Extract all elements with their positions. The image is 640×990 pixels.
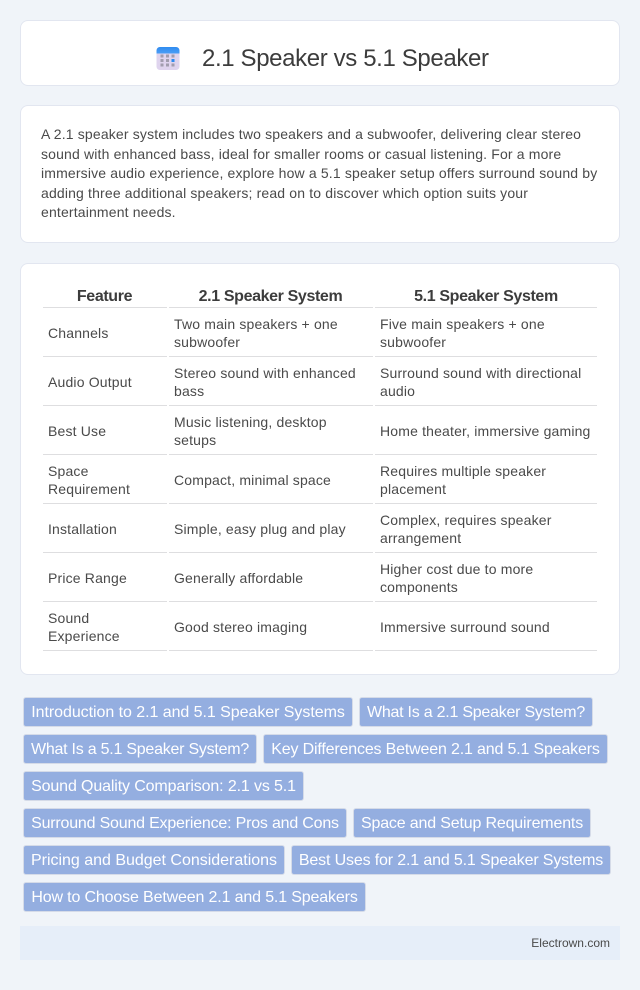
table header: 5.1 Speaker System [414,288,558,305]
intro paragraph: adding three additional speakers; read on to discover which option suits your [41,184,528,200]
table header [77,288,558,305]
topic tags: Sound Quality Comparison: 2.1 vs 5.1 [31,778,296,795]
topic tags: Introduction to 2.1 and 5.1 Speaker Systems [31,704,345,721]
row: audio output: Audio Output [48,374,132,390]
intro paragraph: sound with enhanced bass, ideal for smaller rooms or casual listening. For a more [41,146,561,162]
row: space requirement: Requirement [48,481,130,497]
table header: 2.1 Speaker System [199,288,342,305]
row: audio output: Surround sound with directional [380,365,581,381]
row: installation [48,512,552,546]
intro paragraph: A 2.1 speaker system includes two speakers and a subwoofer, delivering clear stereo [41,126,581,142]
panel: title header [20,20,620,86]
row: channels [48,316,545,350]
row: audio output: bass [174,383,204,399]
row: audio output: Stereo sound with enhanced [174,365,356,381]
row: channels: Five main speakers + one [380,316,545,332]
topic tags: What Is a 2.1 Speaker System? [367,704,585,721]
row: sound experience: Sound [48,610,89,626]
intro paragraph: immersive audio experience, explore how a 5.1 speaker setup offers surround sound by [41,165,597,181]
panel: comparison table card [20,263,620,675]
row: price range: Generally affordable [174,570,303,586]
icon: calendar-style speaker grid [156,47,180,70]
row: sound experience: Immersive surround sound [380,619,550,635]
row: best use: Best Use [48,423,106,439]
topic tags [23,697,611,912]
row: price range: components [380,579,458,595]
row: best use: setups [174,432,216,448]
topic tags: Best Uses for 2.1 and 5.1 Speaker Systems [299,852,603,869]
topic tags: Key Differences Between 2.1 and 5.1 Speakers [271,741,600,758]
row: best use: Music listening, desktop [174,414,327,430]
row: channels: subwoofer [380,334,446,350]
row: space requirement: Space [48,463,89,479]
row: sound experience: Experience [48,628,120,644]
footer: source: Electrown.com [531,936,610,950]
topic tags: What Is a 5.1 Speaker System? [31,741,249,758]
intro paragraph: entertainment needs. [41,204,176,220]
row: channels: Channels [48,325,109,341]
row: audio output: audio [380,383,415,399]
comparison table [43,288,597,651]
title: 2.1 Speaker vs 5.1 Speaker [202,45,489,72]
row: audio output [48,365,581,399]
topic tags: Space and Setup Requirements [361,815,583,832]
row: best use: Home theater, immersive gaming [380,423,591,439]
topic tags: Surround Sound Experience: Pros and Cons [31,815,339,832]
row: installation: Installation [48,521,117,537]
row: installation: Complex, requires speaker [380,512,552,528]
table header: Feature [77,288,132,305]
row: price range: Price Range [48,570,127,586]
row: space requirement: Requires multiple speaker [380,463,546,479]
row: channels: Two main speakers + one [174,316,338,332]
row: space requirement [48,463,546,497]
row: sound experience [48,610,550,644]
topic tags: How to Choose Between 2.1 and 5.1 Speakers [31,889,358,906]
panel: introduction text [20,105,620,243]
row: installation: Simple, easy plug and play [174,521,346,537]
row: space requirement: placement [380,481,446,497]
row: channels: subwoofer [174,334,240,350]
row: installation: arrangement [380,530,461,546]
row: price range: Higher cost due to more [380,561,533,577]
row: best use [48,414,591,448]
topic tags: Pricing and Budget Considerations [31,852,277,869]
row: sound experience: Good stereo imaging [174,619,307,635]
intro paragraph [41,126,598,220]
row: space requirement: Compact, minimal space [174,472,331,488]
footer: source [20,926,620,960]
row: price range [48,561,533,595]
